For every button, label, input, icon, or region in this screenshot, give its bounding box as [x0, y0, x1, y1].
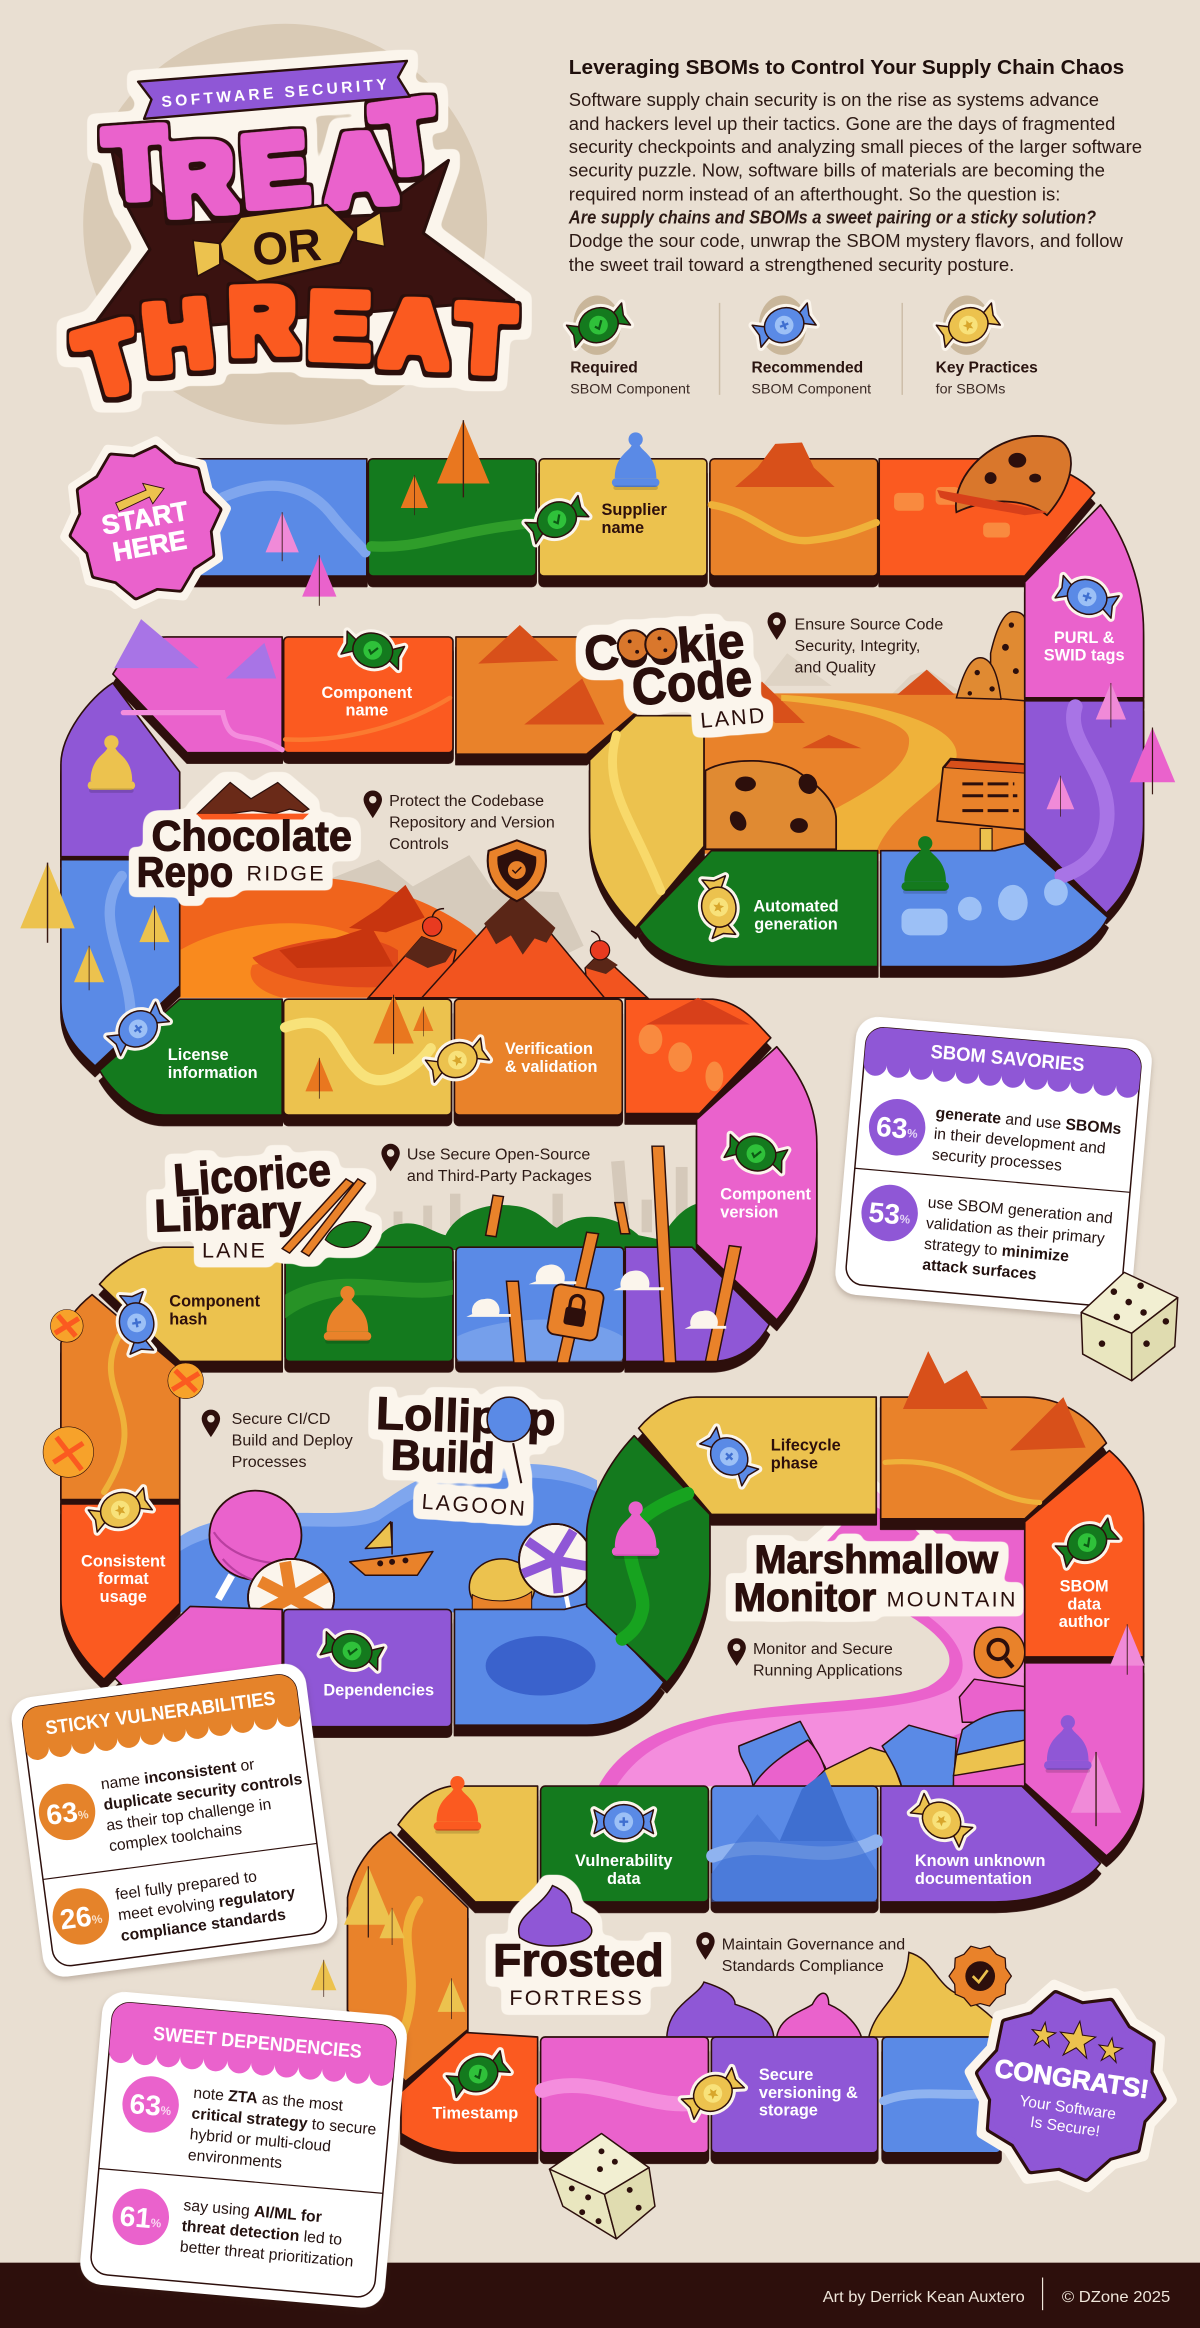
annotation: lollipop: Build and Deploy [232, 1431, 353, 1449]
tile: component hash [100, 1247, 282, 1361]
scene: chocolate repo ridge [180, 855, 648, 998]
tile labels: name [346, 702, 388, 720]
tile labels: usage [100, 1588, 147, 1606]
congrats badge [957, 1976, 1184, 2196]
stat: 53%: 53 [867, 1196, 901, 1230]
tile labels: Known unknown [915, 1852, 1045, 1870]
marshmallows [739, 1679, 1025, 1786]
footer bar [0, 2263, 1200, 2328]
land cookie [705, 761, 836, 849]
sign: cookie code land [582, 613, 768, 742]
card header [863, 1026, 1142, 1099]
stat: 61%: 61 [118, 2199, 153, 2234]
cookie land road [781, 695, 957, 852]
intro body text: required norm instead of an afterthought. So the question is: [569, 183, 1060, 204]
scene: frosting swirls [667, 1952, 1010, 2037]
tile labels: SWID tags [1044, 647, 1125, 665]
tile labels: versioning & [759, 2084, 858, 2102]
intro body text: security checkpoints and analyzing small pieces of the larger software [569, 136, 1142, 157]
intro body text: and hackers level up their tactics. Gone are the days of fragmented [569, 113, 1115, 134]
sign: chocolate repo ridge: Repo [137, 848, 233, 895]
tile: green row 3 [285, 1247, 453, 1361]
stat: 63%: as their top challenge in [105, 1796, 272, 1835]
stat: 61%: say using AI/ML for [183, 2197, 322, 2226]
stat: 63%: generate and use SBOMs [935, 1105, 1122, 1138]
tile decorations [20, 420, 1175, 2104]
annotation: lollipop [202, 1410, 353, 1471]
sign: lollipop build lagoon: Build [390, 1431, 496, 1483]
tile labels: Component [321, 684, 412, 702]
start badge: HERE [110, 525, 189, 567]
stat: 63%: in their development and [933, 1126, 1106, 1158]
intro body text: the sweet trail toward a strengthened security posture. [569, 254, 1014, 275]
stat: 26%: % [91, 1912, 104, 1927]
tile labels: author [1059, 1613, 1110, 1631]
tile labels: documentation [915, 1870, 1032, 1888]
tile: pink right lower [1025, 1663, 1144, 1856]
congrats badge: Is Secure! [1029, 2114, 1101, 2140]
tile labels: License [168, 1046, 229, 1064]
stat: 61%: better threat prioritization [179, 2239, 354, 2271]
tile labels: phase [771, 1454, 818, 1472]
footer credit: Art by Derrick Kean Auxtero [823, 2289, 1025, 2306]
annotation: chocolate repo: Controls [389, 835, 449, 853]
start badge [51, 431, 240, 614]
stat: 61% [110, 2186, 358, 2271]
stat: 63%: security processes [931, 1146, 1063, 1175]
intro heading: Leveraging SBOMs to Control Your Supply Chain Chaos [569, 56, 1124, 79]
card: sweet dependencies: SWEET DEPENDENCIES [152, 2024, 363, 2063]
scene: licorice [374, 1160, 701, 1250]
sign: marshmallow monitor mountain: MOUNTAIN [887, 1587, 1018, 1611]
scene: cookie code land [702, 612, 1031, 854]
word THREAT: THREAT [68, 268, 516, 417]
sign: marshmallow monitor mountain [734, 1538, 1018, 1620]
tile: purple right [1025, 701, 1144, 913]
tile labels: Lifecycle [771, 1437, 841, 1455]
tile labels: & validation [505, 1058, 598, 1076]
card: sticky vulnerabilities: STICKY VULNERABILITIES [44, 1688, 277, 1739]
tile: yellow cookie land [590, 716, 704, 928]
tile: green [368, 459, 536, 576]
sign: lollipop build lagoon: Lollipop [375, 1387, 557, 1445]
candy: OR: OR [250, 218, 323, 276]
stat: 63%: % [160, 2103, 172, 2118]
mountains [368, 937, 456, 998]
annotation: cookie code [768, 612, 943, 677]
intro body text [568, 89, 1142, 275]
tile: orange frosted left [348, 1832, 468, 2082]
board trees [20, 420, 1175, 2019]
banner: software security [138, 61, 410, 119]
stat: 53%: attack surfaces [922, 1257, 1038, 1283]
legend: recommended [750, 295, 871, 397]
tile: orange row 2 [456, 637, 639, 754]
stat: 53%: validation as their primary [925, 1215, 1105, 1248]
tile: purple left [61, 683, 180, 857]
tall cookies [956, 612, 1025, 701]
stat: 61%: % [150, 2216, 162, 2231]
stat: 63% [118, 2074, 380, 2180]
dice: bottom [550, 2134, 655, 2239]
tile: license information [100, 999, 282, 1115]
card: SBOM savories: SBOM SAVORIES [930, 1042, 1085, 1076]
sign: chocolate repo ridge [137, 782, 352, 895]
annotation: chocolate repo [364, 790, 555, 853]
licorice sign sticks and leaf [282, 1179, 353, 1253]
pink ground and road [599, 1525, 1025, 1786]
intro body text: Are supply chains and SBOMs a sweet pairing or a sticky solution? [568, 206, 1097, 227]
icon: frosted badge [949, 1946, 1011, 2006]
tile: blue start [186, 459, 367, 576]
stat: 26%: regulatory [218, 1884, 296, 1911]
dice: right [1081, 1272, 1178, 1381]
sign: chocolate repo ridge: RIDGE [247, 861, 326, 885]
sign: cookie code land: LAND [699, 703, 768, 733]
tile: blue lower right [881, 843, 1108, 967]
annotation: marshmallow: Monitor and Secure [753, 1640, 893, 1658]
word TREAT: TREAT [102, 79, 442, 236]
grey background peaks [330, 855, 584, 980]
clouds [466, 1265, 726, 1329]
annotation: licorice [381, 1144, 592, 1185]
sign: marshmallow monitor mountain: Monitor [734, 1576, 876, 1620]
icon: lock [546, 1283, 605, 1342]
tile labels: Secure [759, 2066, 813, 2084]
tile: orange left [61, 1295, 180, 1500]
tile labels: generation [754, 915, 838, 933]
intro body text: Dodge the sour code, unwrap the SBOM mystery flavors, and follow [569, 230, 1123, 251]
annotation: lollipop: Processes [232, 1453, 306, 1471]
annotation: frosted: Maintain Governance and [722, 1935, 905, 1953]
tile labels: Consistent [81, 1552, 165, 1570]
annotation: licorice: and Third-Party Packages [407, 1167, 592, 1185]
tile: pink row 2 [113, 637, 282, 753]
title logo: Software Security Treat or Threat [68, 24, 516, 425]
candy markers [86, 491, 1121, 2124]
intro body text: Software supply chain security is on the rise as systems advance [569, 89, 1099, 110]
stat: 53%: % [899, 1212, 911, 1227]
tile labels: version [720, 1203, 778, 1221]
congrats badge: Your Software [1018, 2093, 1117, 2123]
tile: timestamp [401, 2033, 538, 2153]
annotation: marshmallow: Running Applications [753, 1661, 903, 1679]
orange swirl candy [247, 1558, 336, 1610]
licorice bushes [374, 1203, 701, 1250]
stat: 63%: 63 [875, 1110, 909, 1144]
cookie letters [618, 629, 676, 661]
card: sticky vulnerabilities [9, 1661, 340, 1979]
tile labels [81, 501, 1125, 2123]
card header [21, 1673, 301, 1761]
tile: consistent format usage [61, 1504, 180, 1679]
tile labels: Vulnerability [575, 1852, 672, 1870]
rivers and paths [104, 486, 1107, 2104]
sign: licorice library lane [153, 1143, 371, 1263]
tile: supplier name [539, 459, 707, 576]
banner: software security: SOFTWARE SECURITY [161, 76, 391, 111]
annotation: cookie code: Ensure Source Code [795, 616, 943, 634]
board: game path tiles [61, 459, 1144, 2153]
sign: licorice library lane: Licorice [172, 1143, 332, 1206]
intro body text: security puzzle. Now, software bills of materials are becoming the [569, 160, 1105, 181]
sign: lollipop build lagoon [375, 1387, 557, 1521]
footer copyright: © DZone 2025 [1062, 2289, 1171, 2306]
pink lollipop [209, 1491, 301, 1580]
tile labels: hash [169, 1310, 207, 1328]
tile: blue final [882, 2037, 1001, 2153]
legend: recommended: SBOM Component [751, 381, 871, 397]
annotation: chocolate repo: Repository and Version [389, 814, 555, 832]
stat: 26%: meet evolving [117, 1894, 220, 1924]
tile labels: storage [759, 2102, 818, 2120]
tile: red corner [879, 459, 1095, 576]
stat: 63%: 63 [128, 2087, 162, 2122]
sign: frosted fortress: FORTRESS [509, 1986, 644, 2010]
yellow gumdrop [468, 1558, 535, 1600]
sign: frosted fortress: Frosted [493, 1934, 664, 1986]
boat [350, 1522, 433, 1575]
legend: key practices: for SBOMs [936, 381, 1005, 397]
sign: licorice library lane: Library [153, 1185, 303, 1242]
legend: required [565, 295, 690, 397]
tile: automated generation [639, 851, 878, 967]
stat: 26%: compliance standards [120, 1906, 287, 1945]
stat: 53%: use SBOM generation and [927, 1194, 1113, 1228]
stat: 63%: to secure [311, 2116, 377, 2139]
hill [180, 877, 520, 998]
candy: OR [193, 205, 385, 282]
tile labels: Timestamp [432, 2105, 518, 2123]
stat: 63% [35, 1750, 309, 1864]
licorice sticks [466, 1146, 741, 1363]
annotation: cookie code: Security, Integrity, [795, 637, 920, 655]
sign: lollipop build lagoon: LAGOON [421, 1490, 528, 1521]
sign: frosted fortress [493, 1886, 664, 2010]
stars [1029, 2015, 1125, 2063]
stat: 63%: % [906, 1126, 919, 1141]
stat: 63%: complex toolchains [108, 1821, 243, 1855]
stat: 53%: strategy to [923, 1236, 1002, 1260]
annotation: frosted: Standards Compliance [722, 1957, 884, 1975]
sign: licorice library lane: LANE [202, 1239, 267, 1263]
annotation: marshmallow [727, 1638, 903, 1679]
tile labels: SBOM [1060, 1578, 1109, 1596]
tile labels: format [98, 1570, 149, 1588]
legend: key practices [934, 295, 1038, 397]
icon: shield [488, 840, 546, 901]
tile labels: Component [169, 1293, 260, 1311]
legend: recommended: Recommended [751, 360, 863, 377]
sign: cookie code land: Code [629, 649, 754, 717]
scene: marshmallow monitor mountain [599, 1480, 1025, 1786]
annotation: chocolate repo: Protect the Codebase [389, 792, 544, 810]
logo backing circle [83, 24, 487, 425]
tile: PURL and SWID tags [1025, 505, 1144, 698]
top cookie [937, 436, 1071, 515]
stat: 63%: 63 [44, 1795, 80, 1831]
lollipop letter [513, 1443, 521, 1483]
stat: 61%: threat detection [181, 2218, 300, 2245]
start badge: START [99, 496, 191, 540]
marshmallow peak [787, 1480, 965, 1559]
tile labels: Supplier [601, 501, 667, 519]
legend: required: SBOM Component [570, 381, 690, 397]
stat: 63%: hybrid or multi-cloud [189, 2126, 332, 2155]
annotation: cookie code: and Quality [795, 659, 876, 677]
stat: 53%: minimize [1001, 1243, 1070, 1265]
tile: vulnerability data [541, 1786, 708, 1902]
tile: blue row 3 [456, 1247, 624, 1361]
scenes behind board [180, 612, 1031, 2037]
tile: SBOM data author [1025, 1451, 1144, 1657]
tile: component name [284, 637, 453, 753]
cherries [423, 917, 442, 936]
tile labels: Component [720, 1186, 811, 1204]
stat: 63%: note ZTA as the most [193, 2085, 344, 2115]
tile labels: Verification [505, 1040, 593, 1058]
tile: orange [710, 459, 878, 576]
tile labels: data [607, 1870, 641, 1888]
tile: blue left [61, 860, 180, 1066]
sign: cookie code land: Cookie [582, 614, 746, 682]
tile: verification [454, 999, 622, 1115]
stat: 26%: 26 [58, 1900, 93, 1935]
wooden sign [937, 759, 1031, 851]
tile: pink final row [541, 2037, 708, 2153]
tile: secure versioning and storage [711, 2037, 878, 2153]
tile: pink row 4 [114, 1606, 282, 1727]
tile labels: PURL & [1054, 629, 1114, 647]
sign: marshmallow monitor mountain: Marshmallow [754, 1538, 999, 1582]
card header [108, 2001, 398, 2087]
cookie land rocks [750, 670, 955, 748]
tile labels: name [601, 519, 644, 537]
stat: 61%: led to [303, 2229, 343, 2249]
card: sweet dependencies [78, 1990, 409, 2310]
tile: green right of lagoon [587, 1436, 710, 1682]
tile: blue row 4 [454, 1603, 664, 1725]
tile: known unknown documentation [881, 1786, 1100, 1902]
legend: key practices: Key Practices [936, 360, 1038, 377]
swirl candies on left [43, 1310, 203, 1477]
tile: dependencies [284, 1609, 451, 1727]
tile labels: information [168, 1064, 258, 1082]
annotation: licorice: Use Secure Open-Source [407, 1146, 590, 1164]
card: SBOM savories [833, 1015, 1154, 1319]
tile: red [625, 999, 771, 1114]
stat: 63%: environments [187, 2147, 283, 2172]
tile labels: data [1067, 1595, 1102, 1613]
logo sticker [68, 61, 516, 417]
sign: chocolate repo ridge: Chocolate [151, 813, 352, 860]
tile: yellow row 5 [398, 1786, 538, 1902]
scene: lollipop lagoon [180, 1464, 597, 1612]
annotation: frosted [696, 1932, 905, 1975]
stat: 63%: critical strategy [191, 2105, 308, 2133]
tile: purple row 3 [625, 1247, 769, 1361]
stat: 63%: name inconsistent or [100, 1756, 256, 1793]
rocks and hills [114, 442, 1086, 1902]
tile: orange upper right [881, 1397, 1106, 1519]
tile labels: Dependencies [323, 1682, 434, 1700]
purple swirl lollipop [519, 1524, 592, 1597]
congrats badge: CONGRATS! [993, 2053, 1151, 2104]
stat: 53% [857, 1182, 1114, 1290]
tile labels: Automated [753, 898, 839, 916]
dark burst behind lettering [86, 148, 514, 336]
tile: lifecycle phase [639, 1397, 876, 1514]
stat: 63%: duplicate security controls [103, 1771, 304, 1814]
stat: 63%: % [77, 1807, 90, 1822]
game pieces [88, 432, 1092, 1834]
tile: component version [697, 1047, 817, 1320]
small red peaks [279, 885, 425, 968]
tile: yellow [284, 999, 451, 1115]
stat: 26% [49, 1860, 299, 1954]
legend: required: Required [570, 360, 638, 377]
icon: magnifier badge [974, 1627, 1025, 1678]
stat: 63% [866, 1097, 1122, 1180]
stat: 26%: feel fully prepared to [114, 1868, 258, 1904]
tile: blue row 5 [711, 1786, 878, 1902]
annotation: lollipop: Secure CI/CD [232, 1410, 330, 1428]
